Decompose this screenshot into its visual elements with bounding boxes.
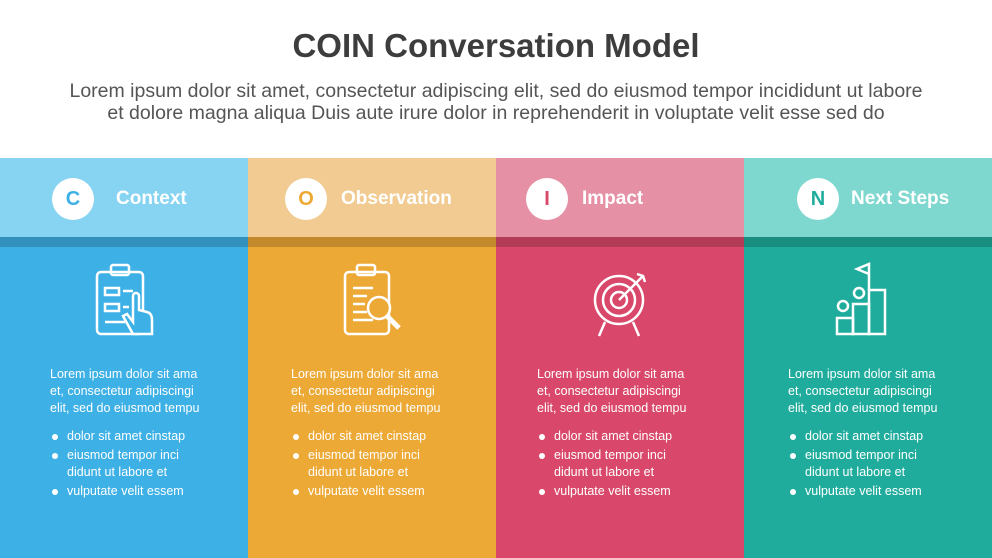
- bullets: context: [52, 429, 185, 498]
- text: next steps: et, consectetur adipiscingi: [788, 384, 932, 398]
- panel: observation: [248, 158, 496, 558]
- text: context: elit, sed do eiusmod tempu: [50, 401, 199, 415]
- header: observation: O: [298, 188, 314, 210]
- bullets: next steps: dolor sit amet cinstap: [805, 429, 923, 443]
- text: observation: et, consectetur adipiscingi: [291, 384, 435, 398]
- text: next steps: elit, sed do eiusmod tempu: [788, 401, 937, 415]
- icon: target: [594, 272, 646, 336]
- bullets: context: vulputate velit essem: [67, 484, 184, 498]
- bullets: context: didunt ut labore et: [67, 465, 167, 479]
- bullets: impact: vulputate velit essem: [554, 484, 671, 498]
- icon: steps flag: [836, 262, 886, 336]
- panel: impact: [496, 158, 744, 558]
- header: impact: Impact: [582, 188, 643, 209]
- subtitle: [69, 80, 923, 124]
- bullets: context: dolor sit amet cinstap: [67, 429, 185, 443]
- header: impact: I: [544, 188, 550, 210]
- header: context: [0, 158, 248, 237]
- subtitle: Lorem ipsum dolor sit amet, consectetur adipiscing elit, sed do eiusmod tempor incididunt ut labore: [69, 80, 923, 102]
- subtitle: et dolore magna aliqua Duis aute irure dolor in reprehenderit in voluptate velit esse sed do: [107, 102, 885, 124]
- bullets: impact: didunt ut labore et: [554, 465, 654, 479]
- text: next steps: Lorem ipsum dolor sit ama: [788, 367, 935, 381]
- bullets: observation: [293, 429, 426, 498]
- bullets: next steps: vulputate velit essem: [805, 484, 922, 498]
- title: COIN Conversation Model: [292, 27, 700, 64]
- text: impact: Lorem ipsum dolor sit ama: [537, 367, 684, 381]
- icon: clipboard hand: [96, 264, 154, 336]
- bullets: next steps: eiusmod tempor inci: [805, 448, 917, 462]
- header: context: C: [66, 188, 80, 210]
- bullets: impact: [539, 429, 672, 498]
- panel: next steps: [744, 158, 992, 558]
- header: observation: Observation: [341, 188, 452, 209]
- bullets: observation: vulputate velit essem: [308, 484, 425, 498]
- bullets: next steps: didunt ut labore et: [805, 465, 905, 479]
- text: observation: Lorem ipsum dolor sit ama: [291, 367, 438, 381]
- header: next steps: Next Steps: [851, 188, 949, 209]
- header: next steps: [744, 158, 992, 237]
- bullets: impact: eiusmod tempor inci: [554, 448, 666, 462]
- text: observation: elit, sed do eiusmod tempu: [291, 401, 440, 415]
- text: impact: et, consectetur adipiscingi: [537, 384, 681, 398]
- text: context: Lorem ipsum dolor sit ama: [50, 367, 197, 381]
- bullets: context: eiusmod tempor inci: [67, 448, 179, 462]
- bullets: next steps: [790, 429, 923, 498]
- text: impact: elit, sed do eiusmod tempu: [537, 401, 686, 415]
- bullets: observation: eiusmod tempor inci: [308, 448, 420, 462]
- text: next steps: [788, 367, 937, 415]
- text: context: et, consectetur adipiscingi: [50, 384, 194, 398]
- bullets: observation: dolor sit amet cinstap: [308, 429, 426, 443]
- header: context: Context: [116, 188, 187, 209]
- panel: context: [0, 158, 248, 558]
- header: observation: [248, 158, 496, 237]
- header: next steps: N: [811, 188, 825, 210]
- text: context: [50, 367, 199, 415]
- text: observation: [291, 367, 440, 415]
- header: impact: [496, 158, 744, 237]
- icon: clipboard magnifier: [344, 264, 401, 336]
- bullets: impact: dolor sit amet cinstap: [554, 429, 672, 443]
- bullets: observation: didunt ut labore et: [308, 465, 408, 479]
- text: impact: [537, 367, 686, 415]
